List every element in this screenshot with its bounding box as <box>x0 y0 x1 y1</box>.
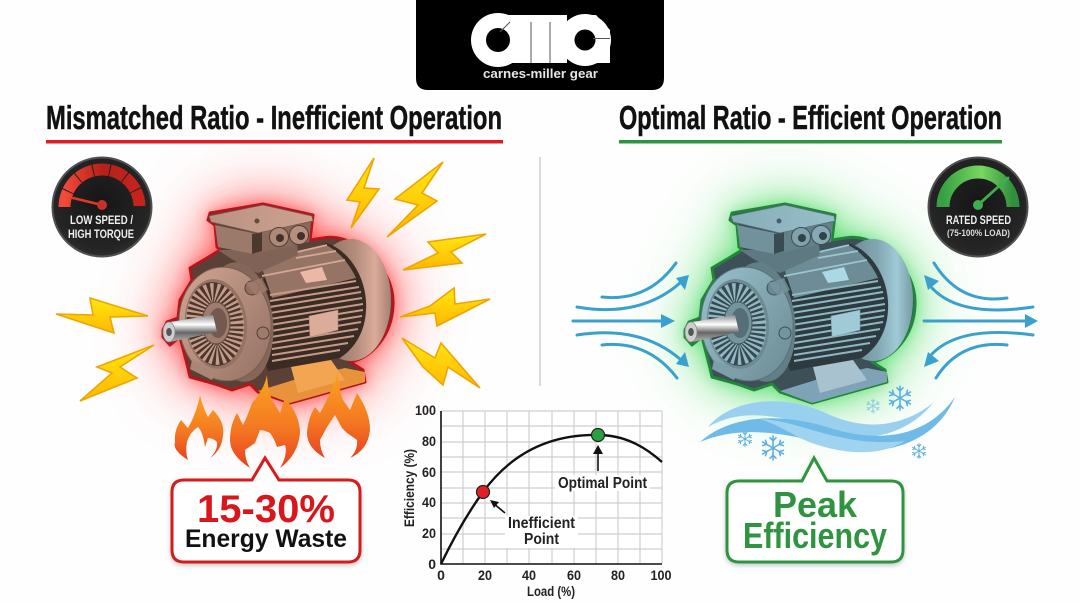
heading: mismatched ratio <box>46 99 503 144</box>
x axis labels: 80 <box>611 567 625 583</box>
cooling waves <box>700 397 955 452</box>
heading: mismatched ratio: Mismatched Ratio - Inefficient Operation <box>46 99 502 136</box>
y axis labels <box>415 402 436 572</box>
optimal point <box>555 428 650 492</box>
callout: peak efficiency: Peak <box>773 484 858 525</box>
motor: overheating <box>163 204 393 403</box>
logo mark <box>471 13 611 67</box>
y axis title: Efficiency (%) <box>401 449 417 527</box>
inefficient point: Inefficient <box>508 515 576 532</box>
airflow arrows: left <box>573 263 689 378</box>
gauge: rated speed: RATED SPEED <box>946 213 1011 227</box>
snowflakes <box>738 386 926 460</box>
x axis title: Load (%) <box>527 583 575 599</box>
gauge: rated speed <box>928 158 1028 256</box>
callout: energy waste <box>172 458 360 562</box>
y axis labels: 80 <box>422 433 436 449</box>
logo wordmark: carnes-miller gear <box>483 66 598 81</box>
airflow arrows: right <box>924 263 1038 378</box>
inefficient point: Point <box>524 531 560 548</box>
gauge: rated speed: (75-100% LOAD) <box>947 228 1010 239</box>
green cool glow <box>685 204 915 403</box>
y axis labels: 0 <box>428 556 436 572</box>
x axis labels: 40 <box>522 567 536 583</box>
gauge: low speed: HIGH TORQUE <box>68 227 134 241</box>
x axis labels: 60 <box>567 567 581 583</box>
callout: energy waste: Energy Waste <box>185 525 347 553</box>
x axis labels: 0 <box>437 567 445 583</box>
logo badge <box>416 0 664 90</box>
x axis labels: 100 <box>650 567 672 583</box>
x axis labels <box>437 567 672 583</box>
callout: energy waste: 15-30% <box>197 488 335 531</box>
callout: peak efficiency <box>727 458 903 562</box>
optimal point: Optimal Point <box>558 475 648 492</box>
inefficient point <box>476 486 578 548</box>
callout: peak efficiency: Efficiency <box>743 515 887 556</box>
red heat glow <box>163 204 393 403</box>
y axis labels: 60 <box>422 464 436 480</box>
y axis labels: 20 <box>422 525 436 541</box>
efficiency curve <box>441 435 662 564</box>
lightning bolts <box>56 158 490 401</box>
y axis labels: 100 <box>415 402 436 418</box>
y axis labels: 40 <box>422 494 436 510</box>
flames <box>175 373 370 468</box>
center divider <box>539 157 541 386</box>
motor: cool running <box>685 204 915 403</box>
x axis labels: 20 <box>478 567 492 583</box>
efficiency chart <box>401 402 672 599</box>
gauge: low speed: LOW SPEED / <box>70 213 134 227</box>
gauge: low speed <box>52 158 152 256</box>
